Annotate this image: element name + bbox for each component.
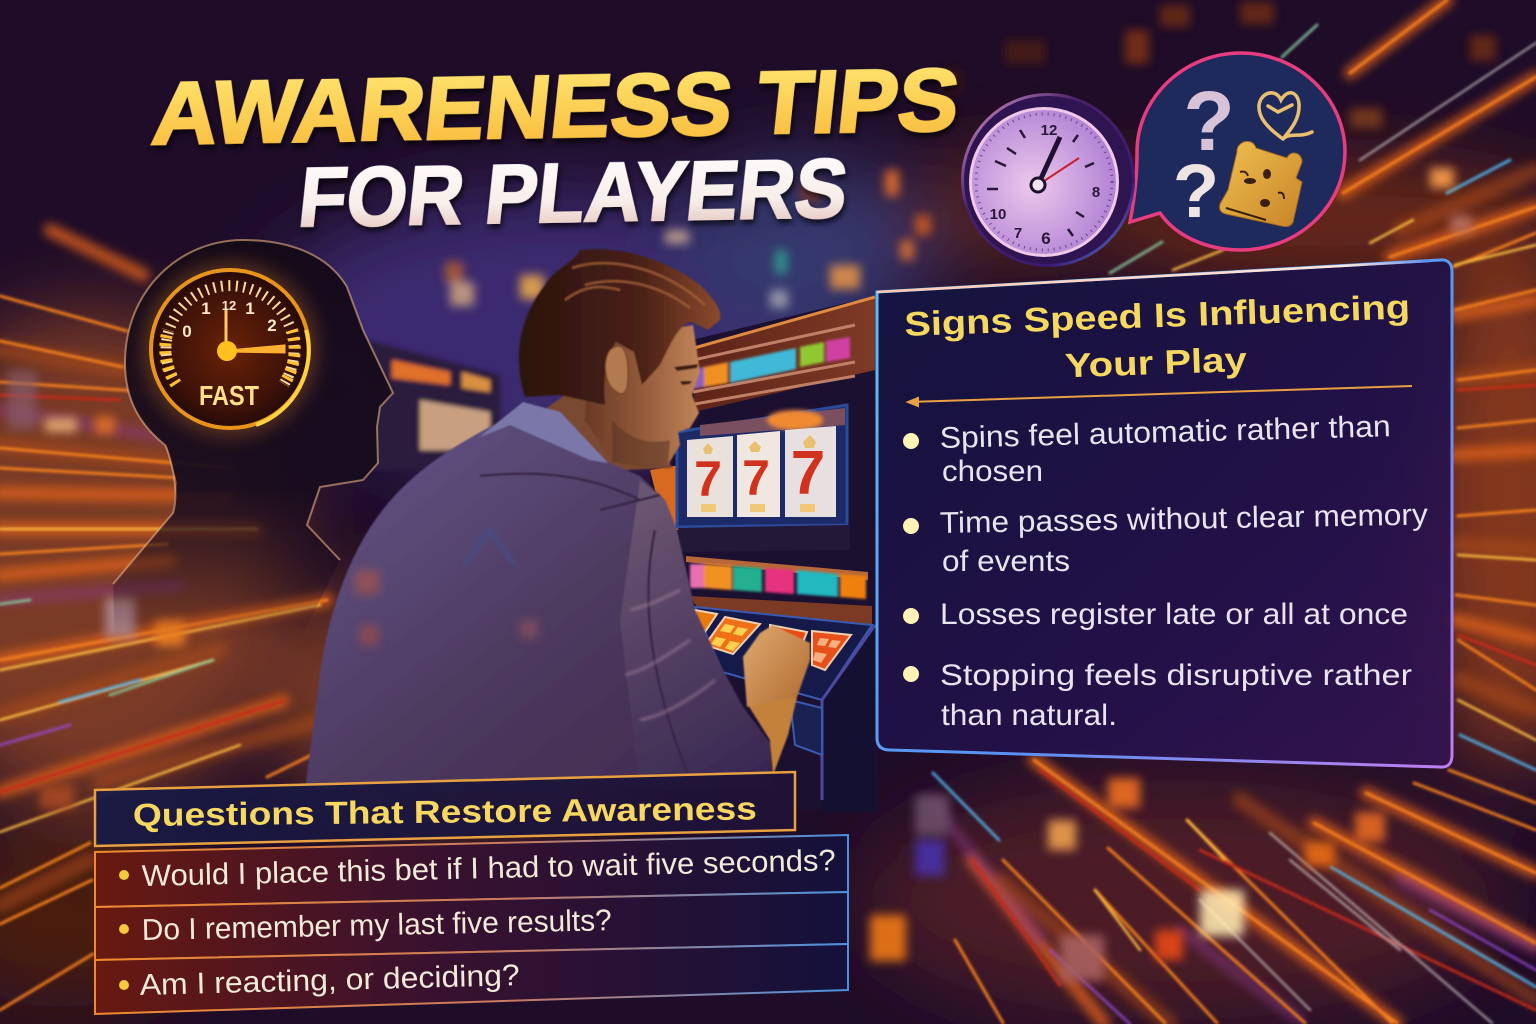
- icon: heart outline: [1259, 93, 1312, 139]
- title line 1: AWARENESS TIPS: [148, 50, 964, 163]
- top lights: [692, 337, 850, 389]
- man playing slot machine: [305, 249, 810, 790]
- question text: Do I remember my last five results?: [141, 904, 612, 947]
- hand: [743, 625, 810, 707]
- ear: [605, 346, 628, 394]
- hair: [519, 249, 720, 405]
- icon: clock: [961, 93, 1135, 267]
- panel heading: Your Play: [1064, 341, 1248, 385]
- reels: 7: [742, 450, 770, 506]
- clock numerals: 8: [1092, 184, 1100, 201]
- reels: 7: [694, 451, 722, 507]
- title line 2: FOR PLAYERS: [294, 141, 852, 244]
- slot machine: [650, 296, 880, 812]
- question mark: ?: [1183, 74, 1235, 168]
- clock numerals: 7: [1014, 225, 1022, 242]
- gauge label: FAST: [199, 380, 259, 411]
- panel: signs speed is influencing your play: [877, 260, 1452, 767]
- heading divider arrow: [908, 386, 1412, 406]
- reels: [687, 426, 836, 517]
- lower cabinet: [822, 625, 875, 812]
- gauge: 0: [182, 322, 192, 341]
- jacket: [305, 402, 772, 790]
- question text: Am I reacting, or deciding?: [139, 959, 520, 1002]
- panel: questions that restore awareness: [95, 772, 848, 1014]
- gauge: 1: [245, 299, 255, 318]
- bullet list: Stopping feels disruptive rather: [940, 659, 1412, 692]
- hair back and neck: [530, 365, 672, 470]
- eye and brow: [674, 364, 698, 385]
- bullet list: than natural.: [941, 699, 1117, 732]
- icon: cheese puzzle: [1220, 141, 1302, 226]
- bullet list: Spins feel automatic rather than: [939, 410, 1391, 455]
- head silhouette: [113, 240, 393, 640]
- question text: Would I place this bet if I had to wait five seconds?: [141, 844, 836, 893]
- background slot machine: [360, 340, 500, 470]
- clock hands: [1038, 137, 1060, 185]
- machine buttons: [695, 610, 851, 670]
- gauge: 12: [222, 298, 236, 313]
- gauge: 2: [267, 316, 277, 335]
- clock numerals: 10: [990, 206, 1006, 223]
- silhouette head with speed gauge: [113, 240, 393, 640]
- icon: speech bubble with question marks: [1130, 53, 1345, 250]
- question rows: [95, 835, 848, 1014]
- gauge: [142, 261, 318, 437]
- clock numerals: [990, 122, 1100, 248]
- title: [146, 50, 967, 247]
- panel heading: Signs Speed Is Influencing: [904, 288, 1411, 344]
- jacket sleeve: [620, 480, 772, 790]
- bullet dots: [903, 433, 919, 682]
- jacket seams: [480, 474, 690, 780]
- reels: 7: [791, 439, 825, 508]
- bullet list: chosen: [942, 455, 1043, 488]
- question mark lower: ?: [1173, 149, 1219, 234]
- lower machine bands: [678, 525, 850, 552]
- bullet list: [939, 410, 1428, 732]
- bullet list: Losses register late or all at once: [940, 598, 1408, 631]
- clock ticks: [987, 130, 1094, 236]
- clock numerals: 6: [1041, 229, 1051, 248]
- face: [585, 325, 700, 465]
- lower lights: [690, 564, 866, 599]
- jacket collar: [480, 402, 608, 463]
- clock numerals: 12: [1041, 122, 1057, 139]
- gauge: 1: [201, 299, 211, 318]
- bullet list: of events: [942, 545, 1070, 578]
- question bullets: [119, 870, 129, 990]
- bullet list: Time passes without clear memory: [940, 498, 1428, 540]
- question text: [139, 844, 836, 1002]
- arm: [748, 697, 797, 775]
- machine top band: [694, 297, 875, 412]
- button deck: [695, 607, 872, 700]
- questions header: Questions That Restore Awareness: [133, 790, 757, 833]
- reel frame: [677, 405, 847, 527]
- panel heading: [904, 288, 1412, 391]
- questions header: [95, 772, 795, 846]
- left machine glow: [650, 465, 680, 530]
